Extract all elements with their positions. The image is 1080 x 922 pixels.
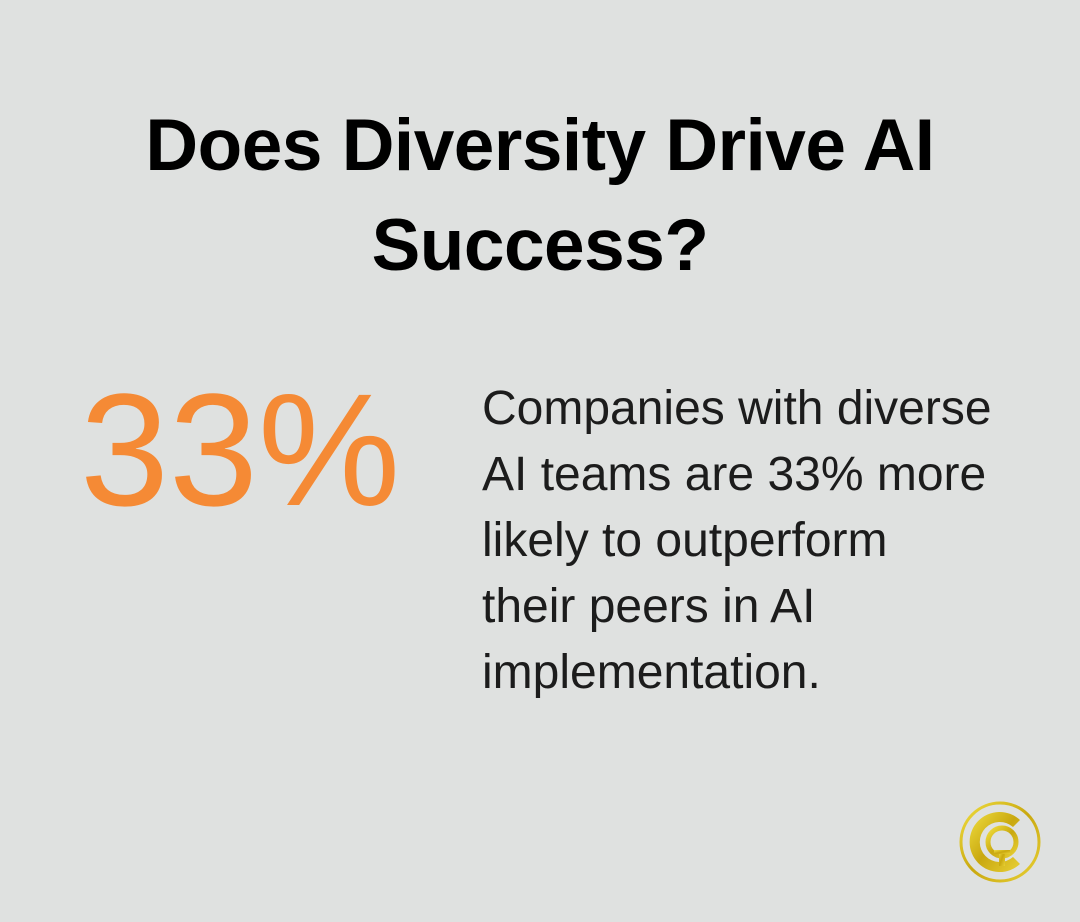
title: Does Diversity Drive AI (145, 105, 935, 186)
description text: likely to outperform (482, 514, 888, 567)
description text: AI teams are 33% more (482, 448, 986, 501)
title (145, 105, 935, 286)
title: Success? (372, 205, 708, 286)
description text (482, 382, 992, 699)
icon: gold logo (960, 802, 1040, 882)
description text: Companies with diverse (482, 382, 992, 435)
description text: implementation. (482, 646, 821, 699)
big stat: 33%: 33% (80, 360, 400, 539)
description text: their peers in AI (482, 580, 816, 633)
